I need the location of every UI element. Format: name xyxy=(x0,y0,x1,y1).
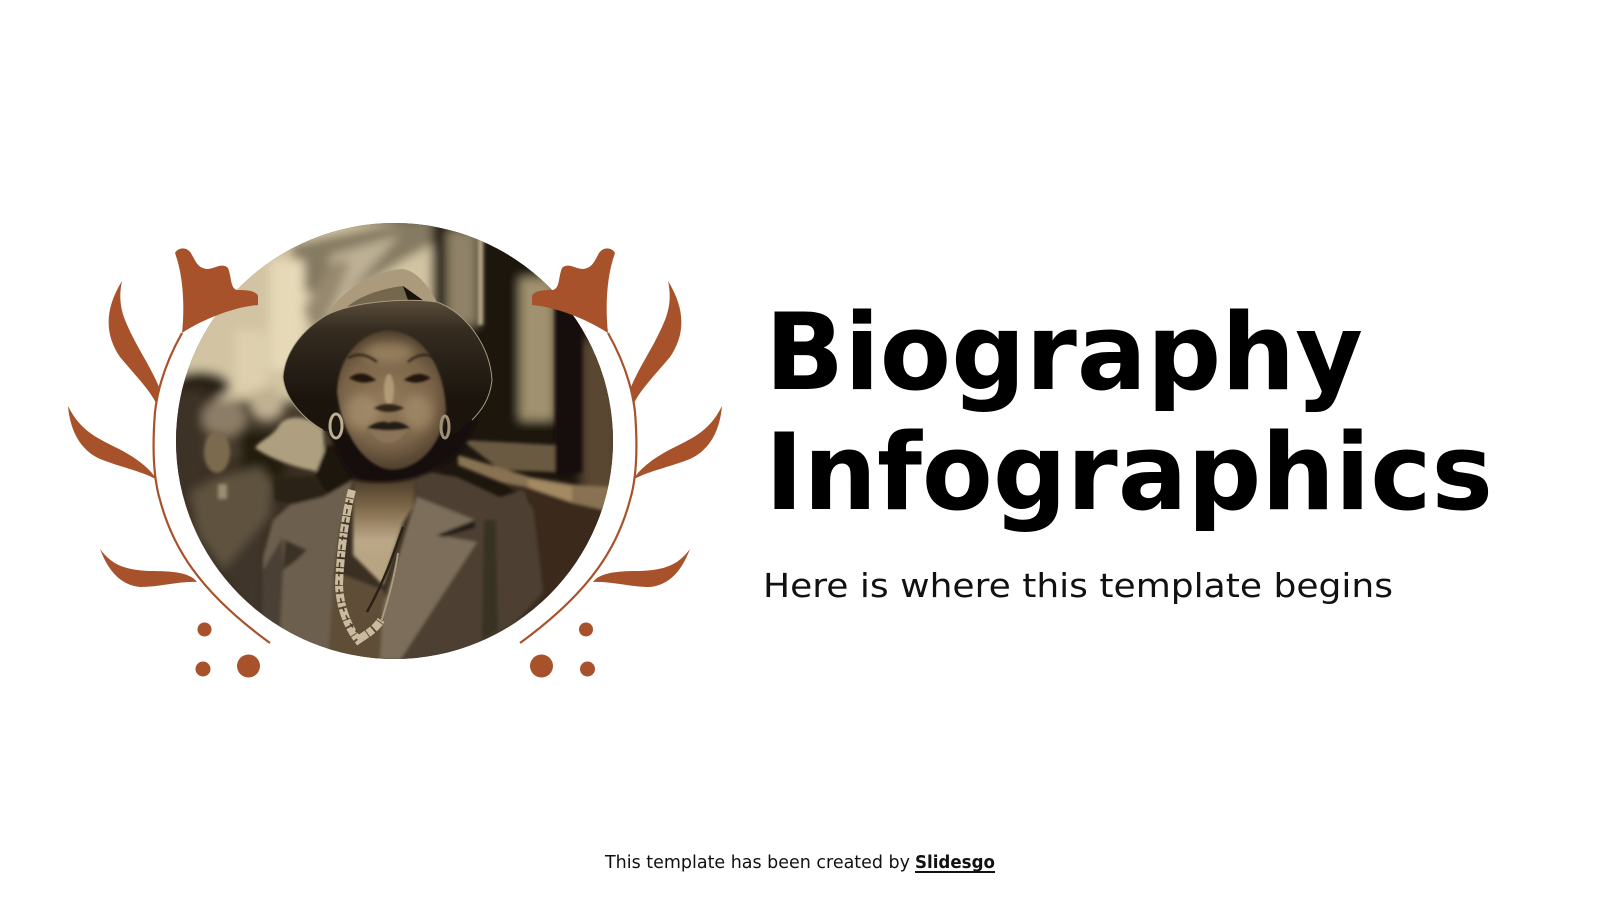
title: Biography xyxy=(765,291,1363,414)
earrings xyxy=(330,414,449,438)
subtitle: Here is where this template begins xyxy=(763,566,1393,605)
facial features xyxy=(345,342,436,443)
footer credit: Slidesgo xyxy=(915,852,995,873)
sepia portrait photo xyxy=(170,215,622,665)
left laurel branch xyxy=(68,248,270,643)
title: Infographics xyxy=(765,411,1493,534)
portrait emblem xyxy=(68,215,722,678)
hat and hair xyxy=(283,269,492,482)
decorative dots xyxy=(196,622,595,678)
right laurel branch xyxy=(520,248,722,643)
title xyxy=(765,291,1493,534)
footer credit: This template has been created by xyxy=(604,852,910,873)
